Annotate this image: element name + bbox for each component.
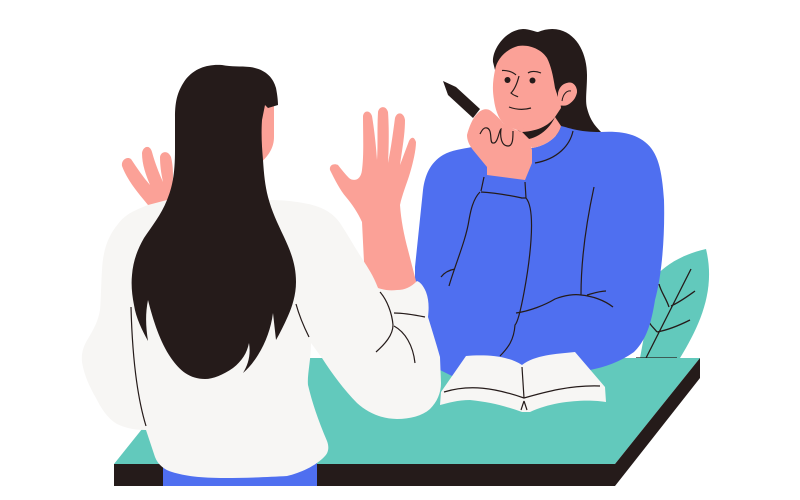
- woman skirt: [163, 460, 317, 486]
- man sweater: [415, 126, 664, 376]
- man facial features: [502, 70, 541, 109]
- table: [114, 358, 700, 486]
- man face: [493, 46, 577, 132]
- woman sweater: [82, 200, 441, 478]
- man hair: [493, 29, 602, 139]
- woman seen from behind: [82, 65, 441, 486]
- woman sweater lines: [131, 292, 425, 426]
- man knuckle lines: [480, 128, 513, 146]
- plant leaf: [636, 249, 709, 358]
- open book: [440, 352, 606, 412]
- woman right arm and hand: [330, 107, 417, 292]
- woman left hand: [122, 147, 173, 205]
- pen: [443, 81, 480, 118]
- man neck: [520, 117, 561, 148]
- man listening: [415, 29, 664, 376]
- man hand on chin: [467, 109, 532, 180]
- man ear: [558, 82, 577, 106]
- woman hair: [132, 65, 296, 379]
- woman face sliver: [258, 105, 274, 165]
- man sweater lines: [441, 131, 613, 356]
